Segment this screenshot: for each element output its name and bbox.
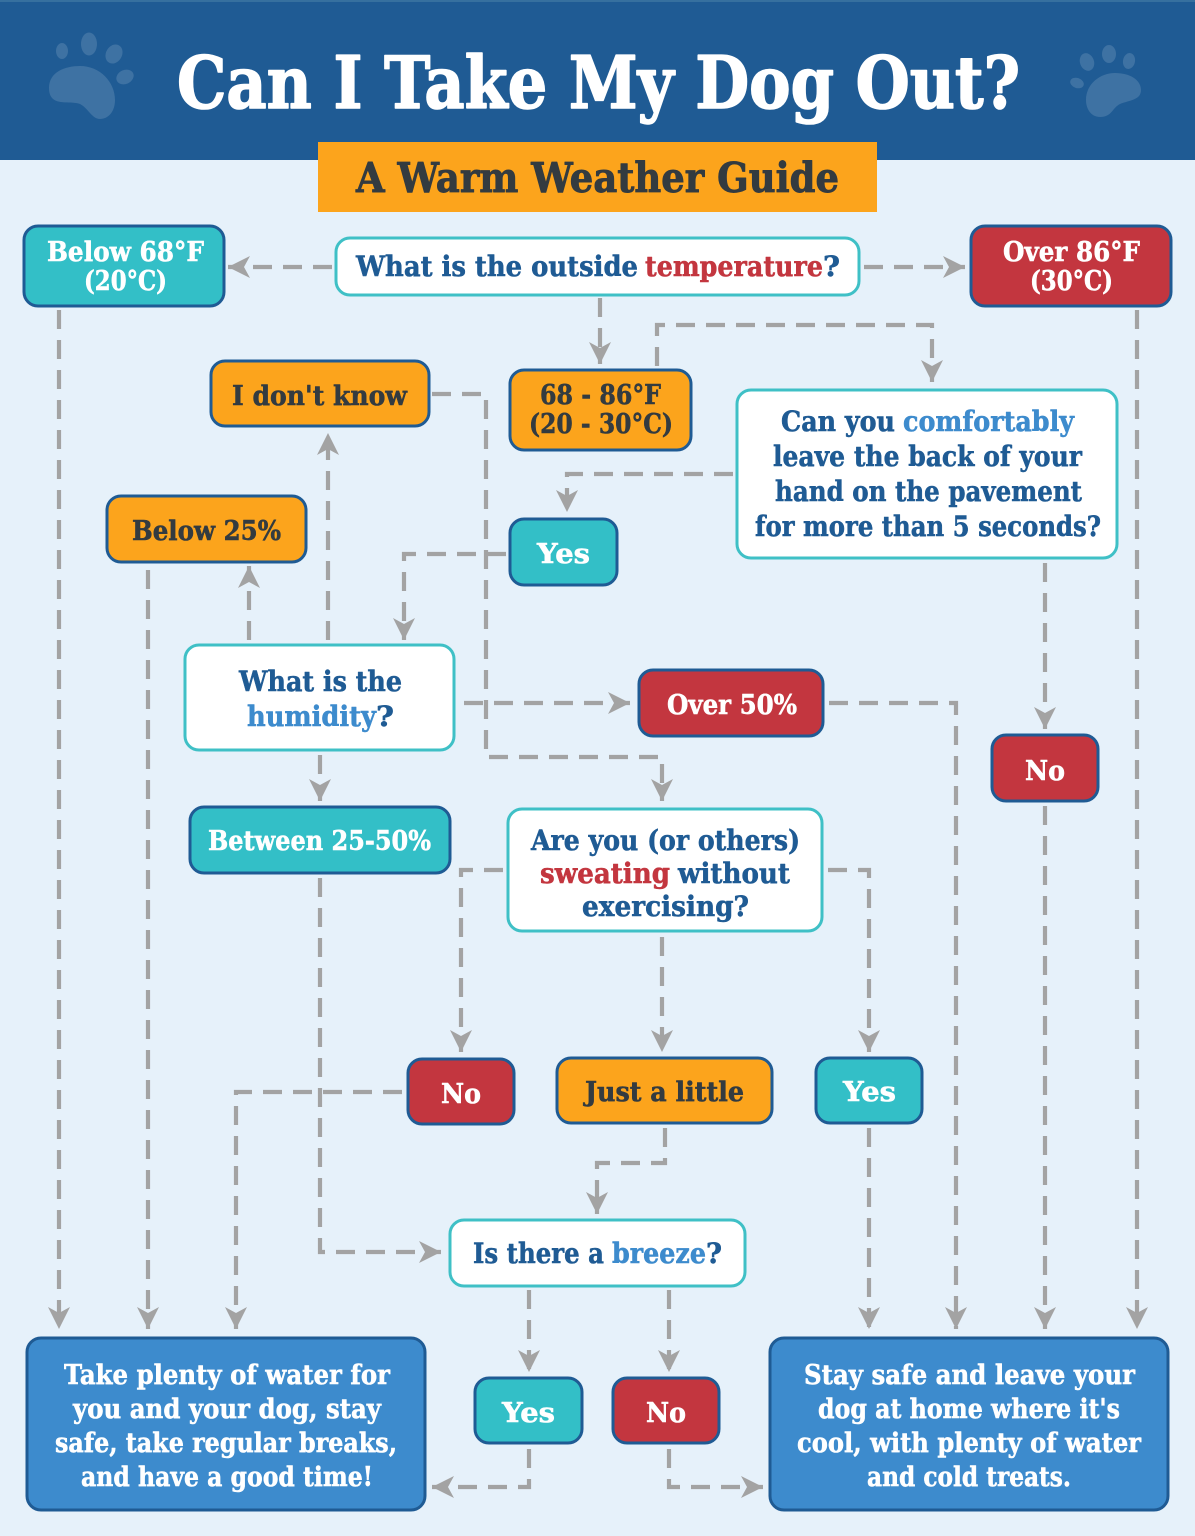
subtitle banner: A Warm Weather Guide bbox=[355, 154, 839, 202]
question: sweating bbox=[508, 809, 822, 931]
box: yes after sweating: Yes bbox=[842, 1077, 896, 1108]
arrow: pavement question to yes bbox=[567, 474, 733, 512]
arrow: humidity to below 25 bbox=[247, 566, 251, 640]
box: no after sweating: No bbox=[441, 1079, 481, 1110]
box: below 25% bbox=[107, 496, 306, 562]
question: pavement: for more than 5 seconds? bbox=[755, 510, 1101, 543]
question: breeze: breeze bbox=[612, 1237, 706, 1270]
arrow: temperature to 68-86 bbox=[598, 298, 602, 364]
box: just a little: Just a little bbox=[583, 1077, 744, 1108]
question: humidity bbox=[185, 645, 454, 750]
question: breeze bbox=[450, 1220, 745, 1286]
box: yes after breeze: Yes bbox=[501, 1398, 555, 1429]
arrow: below 25 to take water bbox=[146, 570, 150, 1329]
box: yes after sweating bbox=[816, 1058, 922, 1123]
box: no after pavement bbox=[992, 735, 1098, 801]
connector arrows bbox=[59, 267, 1137, 1487]
box: I don't know: I don't know bbox=[232, 381, 408, 412]
panel: stay home outcome: cool, with plenty of water bbox=[797, 1428, 1142, 1459]
arrow: no to take water bbox=[236, 1092, 402, 1329]
box: below 25%: Below 25% bbox=[132, 516, 281, 547]
box: below 68F bbox=[24, 226, 224, 306]
arrow: sweating to no bbox=[461, 870, 503, 1052]
box: over 86F bbox=[971, 226, 1171, 306]
box: just a little bbox=[557, 1058, 772, 1123]
question: outside temperature: ? bbox=[823, 250, 840, 283]
panel: stay home outcome: and cold treats. bbox=[867, 1462, 1071, 1493]
arrow: temperature to over 86 bbox=[864, 265, 965, 269]
arrow: over 86 to stay home bbox=[1135, 310, 1139, 1329]
arrow: between 25-50 to breeze bbox=[320, 878, 441, 1252]
arrow: sweating to yes bbox=[828, 870, 869, 1052]
question: humidity: What is the bbox=[238, 665, 402, 698]
title: Can I Take My Dog Out? bbox=[177, 40, 1020, 125]
box: no after breeze bbox=[613, 1378, 719, 1443]
box: I don't know bbox=[211, 361, 429, 426]
arrow: yes to take water bbox=[432, 1449, 529, 1487]
panel: stay home outcome: Stay safe and leave your bbox=[804, 1360, 1136, 1391]
question: pavement: comfortably bbox=[903, 405, 1075, 438]
panel: stay home outcome: dog at home where it's bbox=[818, 1394, 1120, 1425]
arrow: breeze to yes bbox=[527, 1290, 531, 1372]
panel: take water outcome: safe, take regular breaks, bbox=[55, 1428, 397, 1459]
panel: stay home outcome bbox=[770, 1338, 1168, 1510]
question: humidity: ? bbox=[376, 700, 394, 733]
box: yes after pavement: Yes bbox=[536, 539, 590, 570]
question: outside temperature: What is the outside bbox=[355, 250, 638, 283]
box: yes after breeze bbox=[475, 1378, 582, 1443]
subtitle banner bbox=[318, 142, 877, 212]
box: no after breeze: No bbox=[646, 1398, 686, 1429]
arrow: I don't know to sweating question bbox=[432, 394, 662, 801]
box: 68-86F bbox=[510, 370, 691, 450]
panel: take water outcome: you and your dog, stay bbox=[72, 1394, 382, 1425]
arrow: 68-86 to pavement question bbox=[657, 325, 932, 382]
arrow: sweating to just a little bbox=[660, 937, 664, 1052]
question: outside temperature: temperature bbox=[645, 250, 823, 283]
arrow: just a little to breeze bbox=[597, 1128, 665, 1214]
box: between 25-50% bbox=[190, 807, 450, 873]
box: 68-86F: 68 - 86°F bbox=[540, 380, 661, 411]
panel: take water outcome: and have a good time! bbox=[81, 1462, 373, 1493]
question: breeze: ? bbox=[706, 1237, 722, 1270]
question: outside temperature bbox=[336, 238, 859, 295]
arrow: breeze to no bbox=[667, 1290, 671, 1372]
box: below 68F: Below 68°F bbox=[47, 237, 204, 268]
box: over 86F: Over 86°F bbox=[1003, 237, 1140, 268]
arrow: pavement question to no bbox=[1043, 563, 1047, 729]
box: over 86F: (30°C) bbox=[1030, 266, 1113, 297]
question: breeze: Is there a bbox=[473, 1237, 604, 1270]
box: no after pavement: No bbox=[1025, 756, 1065, 787]
box: below 68F: (20°C) bbox=[84, 266, 167, 297]
box: over 50% bbox=[639, 670, 823, 736]
question: pavement: leave the back of your bbox=[773, 440, 1083, 473]
icon: left paw bbox=[49, 32, 136, 119]
question: sweating: sweating bbox=[540, 857, 670, 890]
question: pavement bbox=[737, 390, 1117, 558]
arrow: over 50 to stay home bbox=[829, 703, 956, 1329]
panel: take water outcome bbox=[27, 1338, 425, 1510]
question: pavement: Can you bbox=[781, 405, 895, 438]
box: yes after pavement bbox=[510, 519, 617, 585]
box: between 25-50%: Between 25-50% bbox=[208, 826, 431, 857]
arrow: humidity to over 50 bbox=[464, 701, 630, 705]
box: over 50%: Over 50% bbox=[667, 690, 797, 721]
arrow: yes to stay home bbox=[867, 1128, 871, 1329]
arrow: humidity to between 25-50 bbox=[318, 755, 322, 801]
icon: right paw bbox=[1069, 45, 1141, 117]
box: 68-86F: (20 - 30°C) bbox=[529, 409, 673, 440]
arrow: temperature to below 68 bbox=[228, 265, 332, 269]
question: sweating: without bbox=[677, 857, 790, 890]
arrow: humidity to I don't know bbox=[326, 433, 330, 640]
question: sweating: exercising? bbox=[582, 890, 749, 923]
arrow: no to stay home bbox=[1043, 806, 1047, 1329]
box: no after sweating bbox=[408, 1059, 514, 1124]
arrow: below 68 to take water bbox=[57, 310, 61, 1329]
arrow: yes to humidity question bbox=[404, 554, 506, 640]
arrow: no to stay home bbox=[669, 1449, 763, 1487]
header banner bbox=[0, 0, 1195, 160]
panel: take water outcome: Take plenty of water for bbox=[64, 1360, 391, 1391]
question: humidity: humidity bbox=[247, 700, 377, 733]
question: pavement: hand on the pavement bbox=[775, 475, 1082, 508]
question: sweating: Are you (or others) bbox=[530, 824, 800, 857]
